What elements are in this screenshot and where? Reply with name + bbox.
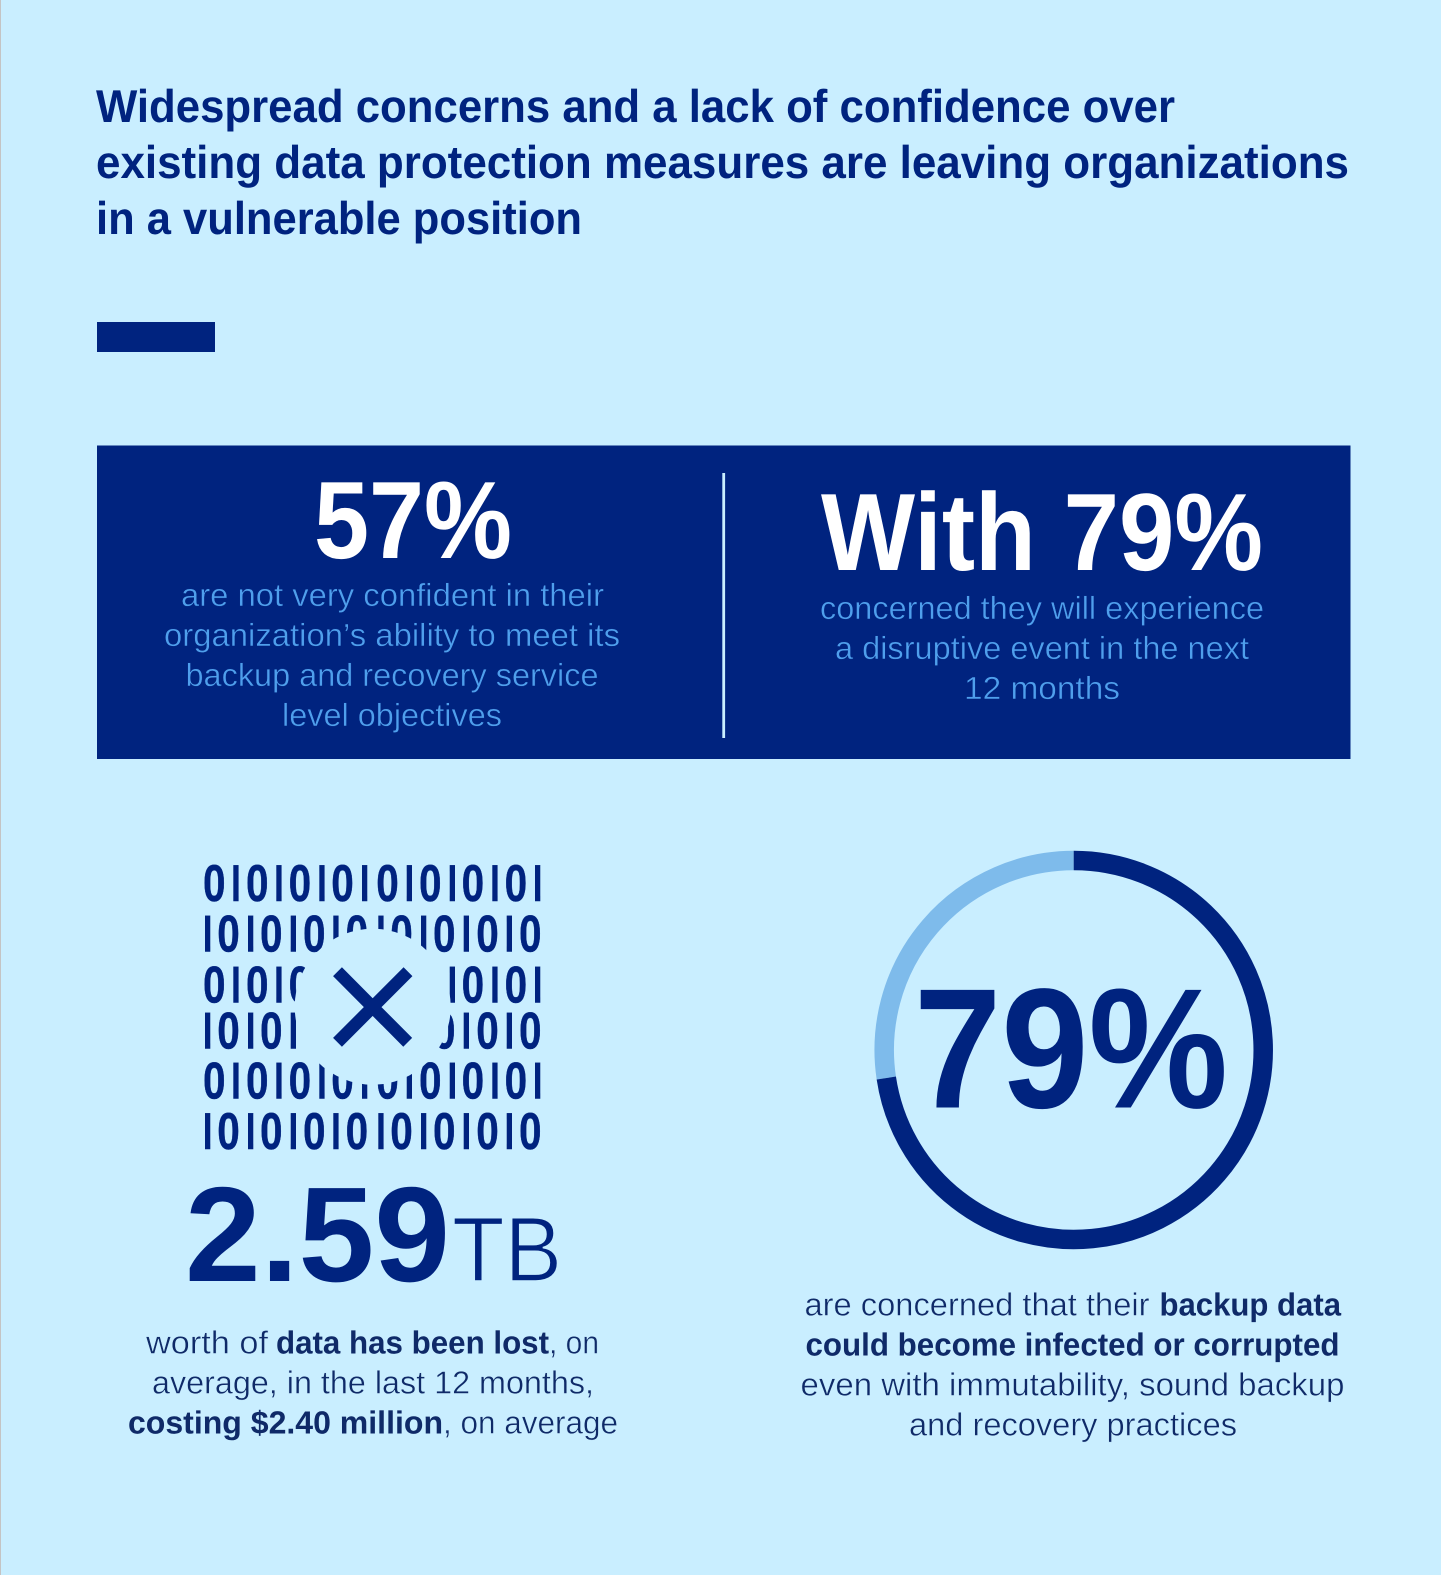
chart: 79% ring xyxy=(884,860,1263,1240)
icon: binary data with cross xyxy=(204,864,540,1150)
text: backup concern description: and recovery practices xyxy=(909,1406,1237,1442)
panel: key statistics xyxy=(97,446,1350,759)
title: existing data protection measures are leaving organizations xyxy=(96,136,1349,188)
text: backup concern description: are concerned that their xyxy=(804,1286,1150,1322)
panel background xyxy=(97,446,1350,759)
text: backup concern description xyxy=(800,1286,1344,1442)
text: data lost description: costing $2.40 million xyxy=(128,1404,443,1440)
icon: binary data with cross: 0101010101010101 xyxy=(203,956,548,1014)
stat: With 79%: With 79% xyxy=(821,471,1263,594)
stat: 2.59 TB: TB xyxy=(452,1199,562,1301)
icon: binary data with cross: 0101010101010101 xyxy=(203,1052,548,1110)
text: data lost description: average, in the last 12 months, xyxy=(152,1364,594,1400)
icon: binary data with cross: 1010101010101010 xyxy=(195,906,542,964)
text: backup concern description: could become infected or corrupted xyxy=(806,1326,1340,1362)
divider xyxy=(722,473,725,738)
icon: binary data with cross: 1010101010101010 xyxy=(195,1103,542,1161)
title: Widespread concerns and a lack of confidence over xyxy=(96,80,1175,132)
text: 79% description: a disruptive event in the next xyxy=(835,630,1249,666)
text: data lost description: , on xyxy=(549,1324,599,1360)
title: in a vulnerable position xyxy=(96,192,582,244)
text: 57% description: level objectives xyxy=(282,697,502,733)
stat: 2.59 TB xyxy=(185,1159,562,1310)
text: backup concern description: even with immutability, sound backup xyxy=(800,1366,1344,1402)
stat: 57%: 57% xyxy=(314,459,512,582)
text: 57% description: organization’s ability to meet its xyxy=(164,617,620,653)
text: 57% description xyxy=(164,577,620,733)
icon: binary data with cross: 1010101010101010 xyxy=(195,1002,542,1060)
ring: value arc xyxy=(886,860,1263,1240)
title xyxy=(96,80,1349,244)
stat: 79%: 79% xyxy=(914,954,1228,1144)
text: 57% description: are not very confident in their xyxy=(181,577,604,613)
text: 79% description: 12 months xyxy=(964,670,1120,706)
text: backup concern description: backup data xyxy=(1160,1286,1341,1322)
ring: remainder arc xyxy=(884,860,1074,1078)
text: 79% description xyxy=(820,590,1264,706)
text: 57% description: backup and recovery service xyxy=(186,657,598,693)
text: data lost description: worth of xyxy=(145,1324,268,1360)
text: data lost description: data has been lost xyxy=(276,1324,549,1360)
text: data lost description xyxy=(128,1324,618,1440)
stat: 2.59 TB: 2.59 xyxy=(185,1159,450,1310)
icon: binary data with cross: 0101010101010101 xyxy=(203,855,548,913)
accent bar xyxy=(97,322,215,352)
text: 79% description: concerned they will experience xyxy=(820,590,1264,626)
text: data lost description: , on average xyxy=(443,1404,618,1440)
